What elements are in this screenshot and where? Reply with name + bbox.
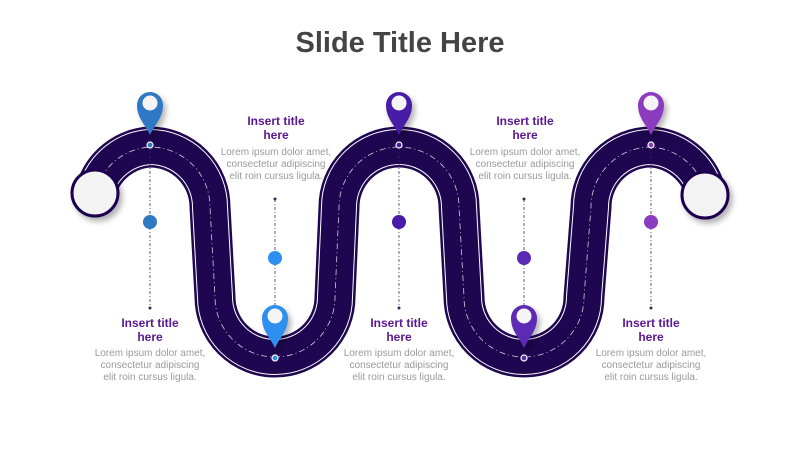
texts: consectetur adipiscing [101, 360, 199, 371]
texts: here [638, 330, 664, 344]
texts: Lorem ipsum dolor amet, [596, 348, 706, 359]
texts: elit roin cursus ligula. [103, 372, 197, 383]
markers on road [147, 142, 654, 361]
texts: consectetur adipiscing [227, 159, 325, 170]
texts: here [512, 128, 538, 142]
texts: Insert title [247, 114, 305, 128]
texts: Lorem ipsum dolor amet, [470, 147, 580, 158]
texts: Lorem ipsum dolor amet, [95, 348, 205, 359]
texts [95, 114, 706, 383]
texts: consectetur adipiscing [476, 159, 574, 170]
texts: elit roin cursus ligula. [478, 171, 572, 182]
texts: here [386, 330, 412, 344]
texts: Insert title [370, 316, 428, 330]
texts: Lorem ipsum dolor amet, [221, 147, 331, 158]
end circle [682, 172, 728, 218]
texts: consectetur adipiscing [350, 360, 448, 371]
texts: Insert title [121, 316, 179, 330]
title: Slide Title Here [296, 27, 504, 59]
dots [143, 215, 658, 265]
texts: Insert title [622, 316, 680, 330]
texts: consectetur adipiscing [602, 360, 700, 371]
texts: here [263, 128, 289, 142]
texts: elit roin cursus ligula. [229, 171, 323, 182]
start circle [72, 170, 118, 216]
texts: elit roin cursus ligula. [604, 372, 698, 383]
timeline lines [150, 147, 651, 308]
road [96, 147, 705, 357]
texts: elit roin cursus ligula. [352, 372, 446, 383]
pins [137, 92, 664, 348]
texts: Lorem ipsum dolor amet, [344, 348, 454, 359]
texts: here [137, 330, 163, 344]
texts: Insert title [496, 114, 554, 128]
